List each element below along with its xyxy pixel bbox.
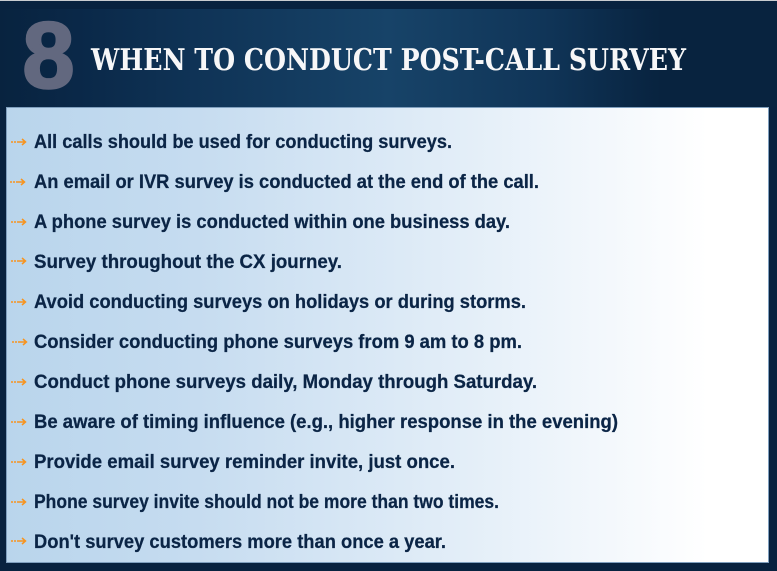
section number 8: 8: [22, 2, 74, 108]
item 5: Avoid conducting surveys on holidays or during storms.: [34, 292, 526, 313]
header band: [0, 1, 777, 107]
item 1: All calls should be used for conducting surveys.: [34, 132, 452, 153]
top edge strip: [0, 0, 777, 1]
item 10: Phone survey invite should not be more than two times.: [34, 492, 499, 513]
item 8: Be aware of timing influence (e.g., higher response in the evening): [34, 412, 618, 433]
item 6: Consider conducting phone surveys from 9 am to 8 pm.: [34, 332, 522, 353]
item 4: Survey throughout the CX journey.: [34, 252, 342, 273]
item 11: Don't survey customers more than once a year.: [34, 532, 446, 553]
item 3: A phone survey is conducted within one business day.: [34, 212, 510, 233]
panel: survey timing list: [6, 108, 768, 562]
item 2: An email or IVR survey is conducted at the end of the call.: [34, 172, 539, 193]
item 7: Conduct phone surveys daily, Monday through Saturday.: [34, 372, 537, 393]
item 9: Provide email survey reminder invite, just once.: [34, 452, 455, 473]
title: WHEN TO CONDUCT POST-CALL SURVEY: [90, 43, 686, 78]
